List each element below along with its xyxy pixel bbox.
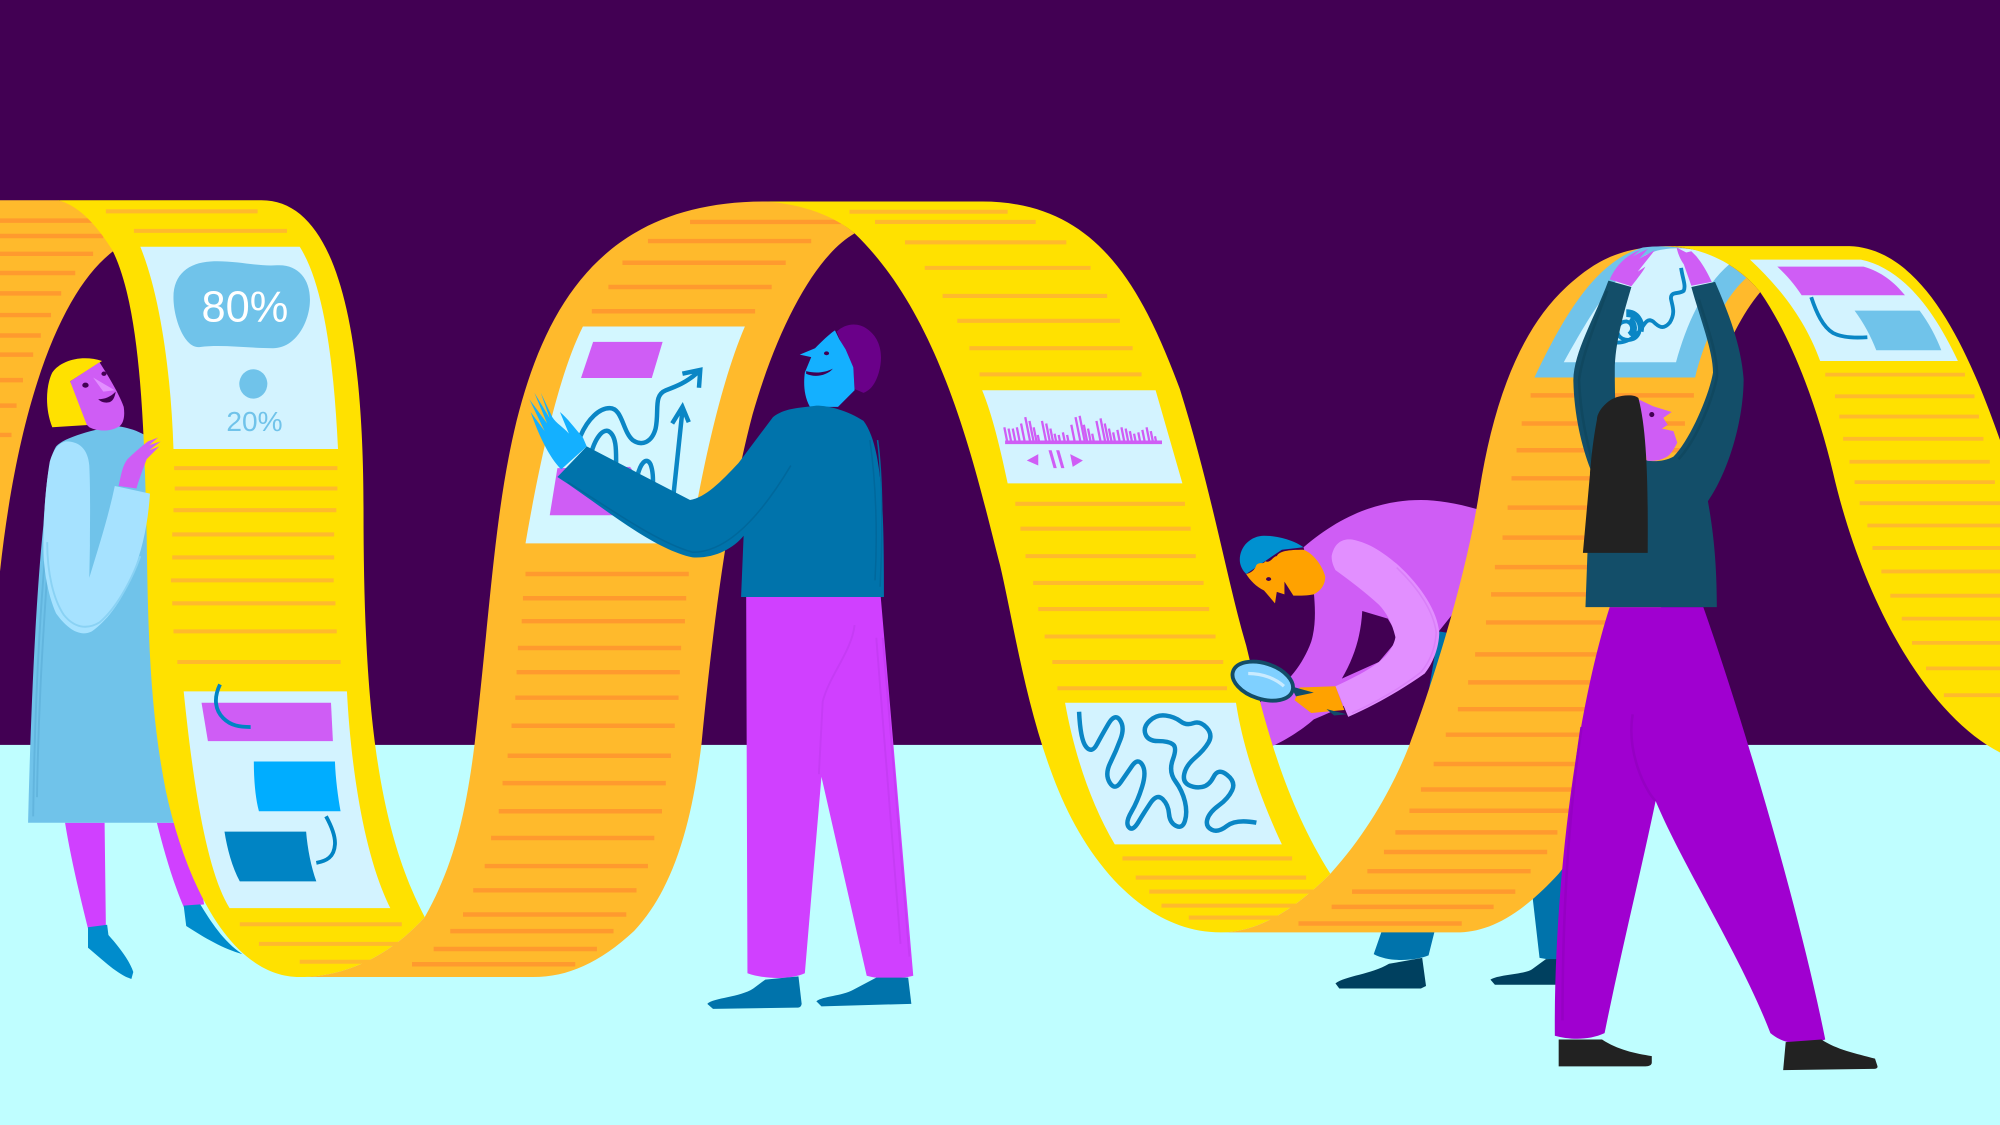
ribbon segment: second yellow page: [765, 202, 1330, 932]
woman neck and face: [70, 362, 124, 431]
man 2 legs: [1374, 631, 1562, 962]
panel: magenta and blue blocks: [1750, 260, 1958, 361]
bright blue block: [254, 761, 341, 811]
woman eyes: [82, 372, 107, 388]
man 2 shoes: [1335, 958, 1562, 989]
text lines: [1298, 395, 1694, 923]
panel background: [1750, 260, 1958, 361]
dark blue block: [224, 832, 316, 881]
woman dress: [28, 426, 179, 823]
man face: [800, 330, 855, 407]
person: man bending over (body behind ribbon): [1240, 500, 1562, 989]
man 2 eye: [1266, 577, 1271, 581]
floor: [0, 745, 2000, 1125]
curve strokes: [216, 684, 335, 863]
spiral squiggle: [1612, 268, 1685, 343]
panel: spiral line: [1534, 246, 1746, 378]
man 2 torso: [1259, 500, 1492, 747]
magenta block top: [581, 342, 663, 378]
segment fill: [1671, 246, 2000, 753]
panel: waveform: [982, 390, 1182, 483]
blue block: [1855, 311, 1941, 350]
woman nose: [93, 378, 115, 392]
panel: 80 percent and 20 percent: [140, 247, 338, 449]
woman 2 trousers: [1555, 607, 1825, 1044]
dress fold shading: [33, 561, 47, 816]
arm fold shading: [1352, 568, 1436, 713]
segment fill: [765, 202, 1330, 932]
ribbon segment: second orange page: [300, 202, 855, 977]
value 80%: 80%: [201, 283, 288, 331]
woman hand: [119, 438, 161, 489]
magenta block: [202, 703, 333, 741]
gap between torso and arm: [1342, 611, 1399, 679]
woman 2 face: [1638, 399, 1677, 461]
sweater fold shading: [1579, 291, 1717, 466]
woman smile: [98, 392, 116, 403]
woman legs: [65, 823, 204, 929]
ribbon segment: first yellow page: [57, 200, 425, 977]
man shoes: [707, 976, 911, 1009]
man 2 face: [1246, 550, 1325, 603]
magenta block bottom: [550, 467, 663, 515]
text lines: [412, 222, 843, 964]
trouser fold shading: [819, 625, 909, 957]
panel background: [1065, 703, 1282, 844]
panel background: [140, 247, 338, 449]
panel: growth chart: [526, 327, 745, 543]
person: woman reaching up: [1555, 247, 1878, 1070]
sleeve fold shading: [47, 542, 140, 627]
man trousers: [746, 597, 913, 979]
lens: [1228, 654, 1298, 708]
text lines: [1825, 375, 2000, 695]
sweater fold shading: [568, 440, 882, 587]
ribbon segment: third orange page: [1221, 246, 1760, 932]
woman sleeve: [43, 441, 150, 633]
waveform bars: [1004, 416, 1156, 441]
ribbon segment: last yellow page: [1671, 246, 2000, 753]
value 20%: 20%: [226, 406, 283, 437]
squiggle line: [1079, 712, 1256, 831]
man hand: [529, 393, 587, 469]
text lines: [849, 212, 1316, 918]
wave line with arrow: [580, 370, 700, 487]
highlight: [1248, 673, 1284, 686]
panel: squiggle: [1065, 703, 1282, 844]
panel: colored blocks: [184, 684, 390, 908]
panel background: [184, 691, 390, 908]
panel background: [526, 327, 745, 543]
man 2 hair: [1240, 536, 1304, 574]
curve stroke: [1811, 297, 1867, 338]
man eye: [824, 351, 829, 355]
waveform baseline: [1005, 441, 1162, 444]
woman 2 hair: [1583, 395, 1648, 553]
segment fill: [300, 202, 855, 977]
woman hair: [47, 358, 102, 427]
dot: [239, 369, 267, 399]
woman 2 shoes: [1559, 1040, 1878, 1070]
person: woman in blue dress (body behind ribbon): [28, 358, 242, 979]
man hair: [837, 324, 881, 393]
magenta block: [1777, 267, 1905, 295]
woman arm and hand in front of ribbon: [43, 438, 161, 633]
woman 2 sweater and arms: [1573, 281, 1744, 607]
handle: [1291, 686, 1347, 716]
playback controls: [1027, 450, 1083, 468]
text lines: [106, 211, 408, 962]
woman 2 eye: [1649, 412, 1654, 417]
icon: magnifying glass: [1228, 654, 1347, 716]
segment fill: [1221, 246, 1760, 932]
text lines: [0, 221, 103, 435]
woman 2 hands: [1610, 247, 1712, 286]
trouser fold shading: [1562, 714, 1656, 1020]
man mouth: [806, 369, 833, 376]
up arrow: [672, 407, 689, 495]
blob: [173, 261, 310, 348]
person: man in blue sweater: [529, 324, 913, 1009]
man sweater and arm: [557, 406, 884, 597]
panel background: [982, 390, 1182, 483]
background wall: [0, 0, 2000, 746]
segment fill: [57, 200, 425, 977]
man 2 arm: [1332, 539, 1439, 717]
woman shoes: [88, 904, 242, 979]
panel inner light: [1564, 248, 1730, 362]
segment fill: [0, 200, 115, 571]
ribbon segment: far-left orange: [0, 200, 115, 571]
man 2 hand: [1295, 686, 1344, 713]
panel outer blue: [1534, 246, 1746, 378]
